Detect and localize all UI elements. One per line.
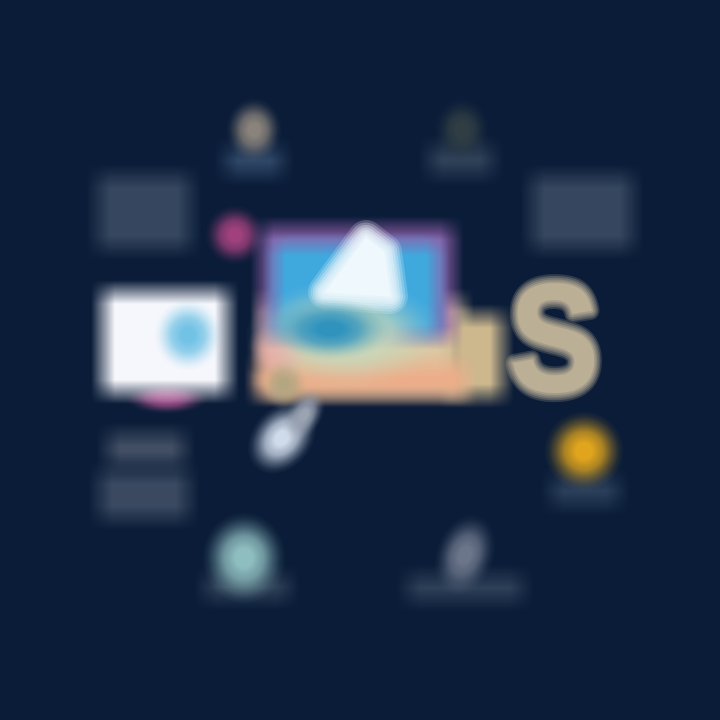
icon: pink dot <box>205 205 265 265</box>
icon: green circle <box>202 512 286 604</box>
letter S: S <box>510 253 599 424</box>
letter S: S <box>510 253 599 424</box>
wordmark dark letter <box>260 358 308 410</box>
letter S: S <box>510 253 599 424</box>
text block: lower left top <box>100 426 192 470</box>
icon: grey pencil <box>423 506 507 604</box>
letter S: S <box>510 253 599 424</box>
image frame: purple <box>250 216 464 350</box>
card: white window <box>91 280 239 404</box>
text block: upper left <box>90 168 198 256</box>
infographic canvas <box>90 100 640 606</box>
label: top left <box>218 142 290 182</box>
label: top right <box>424 140 498 180</box>
icon: top left person <box>226 98 282 162</box>
wordmark base: tan <box>250 288 474 406</box>
icon: top right person <box>434 98 490 162</box>
label: gold coin <box>546 474 624 510</box>
text block: lower left bottom <box>92 466 196 526</box>
pale hill <box>245 280 445 390</box>
icon: blue circle on card <box>154 299 222 371</box>
sky panel: blue <box>262 232 450 348</box>
text block: upper right <box>524 168 640 256</box>
letter S: S <box>510 253 599 424</box>
label: grey pencil <box>402 570 528 606</box>
icon: pen tip <box>233 388 331 488</box>
card underside: pink <box>125 382 209 414</box>
icon: gold coin <box>544 411 624 491</box>
wordmark pink accent <box>246 320 310 380</box>
icon: pen body <box>274 381 334 449</box>
label: green circle <box>200 570 294 604</box>
wordmark peach strip <box>244 352 478 408</box>
teal lake <box>268 298 392 360</box>
letter S: S <box>510 253 599 424</box>
wordmark right letter <box>444 305 513 407</box>
